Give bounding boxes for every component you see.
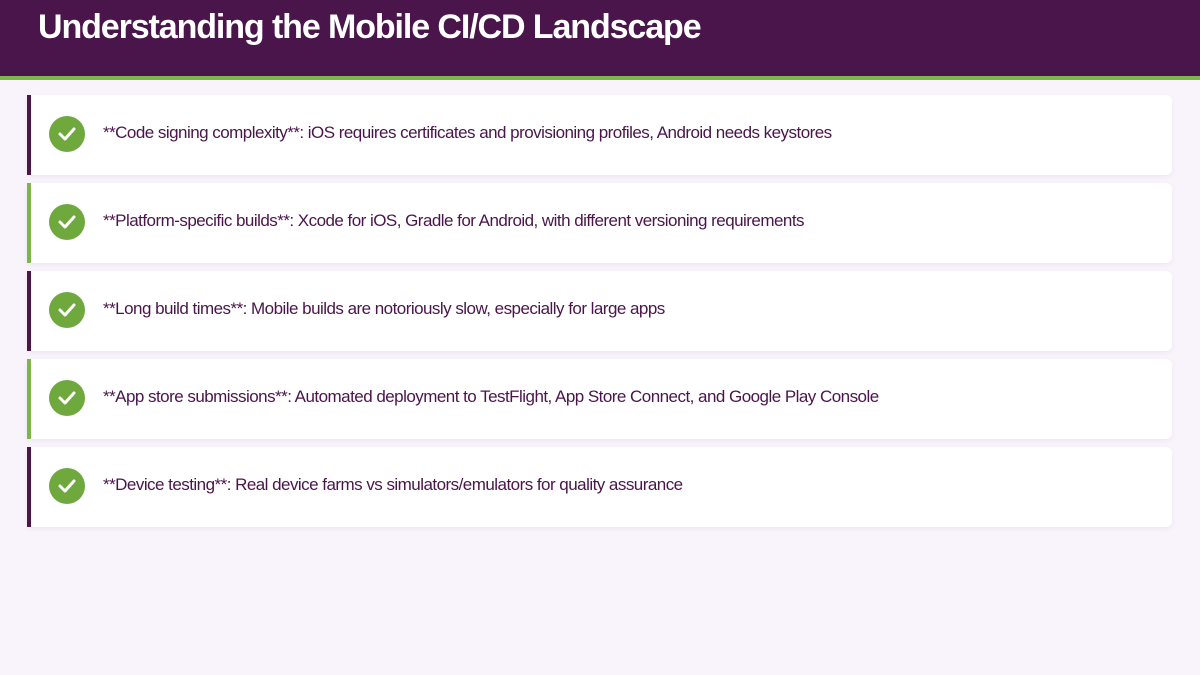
- text: **Code signing complexity**: iOS requires certificates and provisioning profiles, Android needs keystores: [103, 123, 832, 142]
- icon: check: [49, 292, 85, 328]
- text: **App store submissions**: Automated deployment to TestFlight, App Store Connect, and Google Play Console: [103, 387, 879, 406]
- card: code signing: [27, 95, 1172, 175]
- text: **Platform-specific builds**: Xcode for iOS, Gradle for Android, with different versioning requirements: [103, 211, 804, 230]
- icon: check: [49, 116, 85, 152]
- header: [0, 0, 1200, 80]
- title: Understanding the Mobile CI/CD Landscape: [38, 8, 701, 46]
- card: platform builds: [27, 183, 1172, 263]
- card: app store: [27, 359, 1172, 439]
- card: build times: [27, 271, 1172, 351]
- card: device testing: [27, 447, 1172, 527]
- icon: check: [49, 204, 85, 240]
- icon: check: [49, 468, 85, 504]
- text: **Long build times**: Mobile builds are notoriously slow, especially for large apps: [103, 299, 665, 318]
- text: **Device testing**: Real device farms vs simulators/emulators for quality assurance: [103, 475, 683, 494]
- icon: check: [49, 380, 85, 416]
